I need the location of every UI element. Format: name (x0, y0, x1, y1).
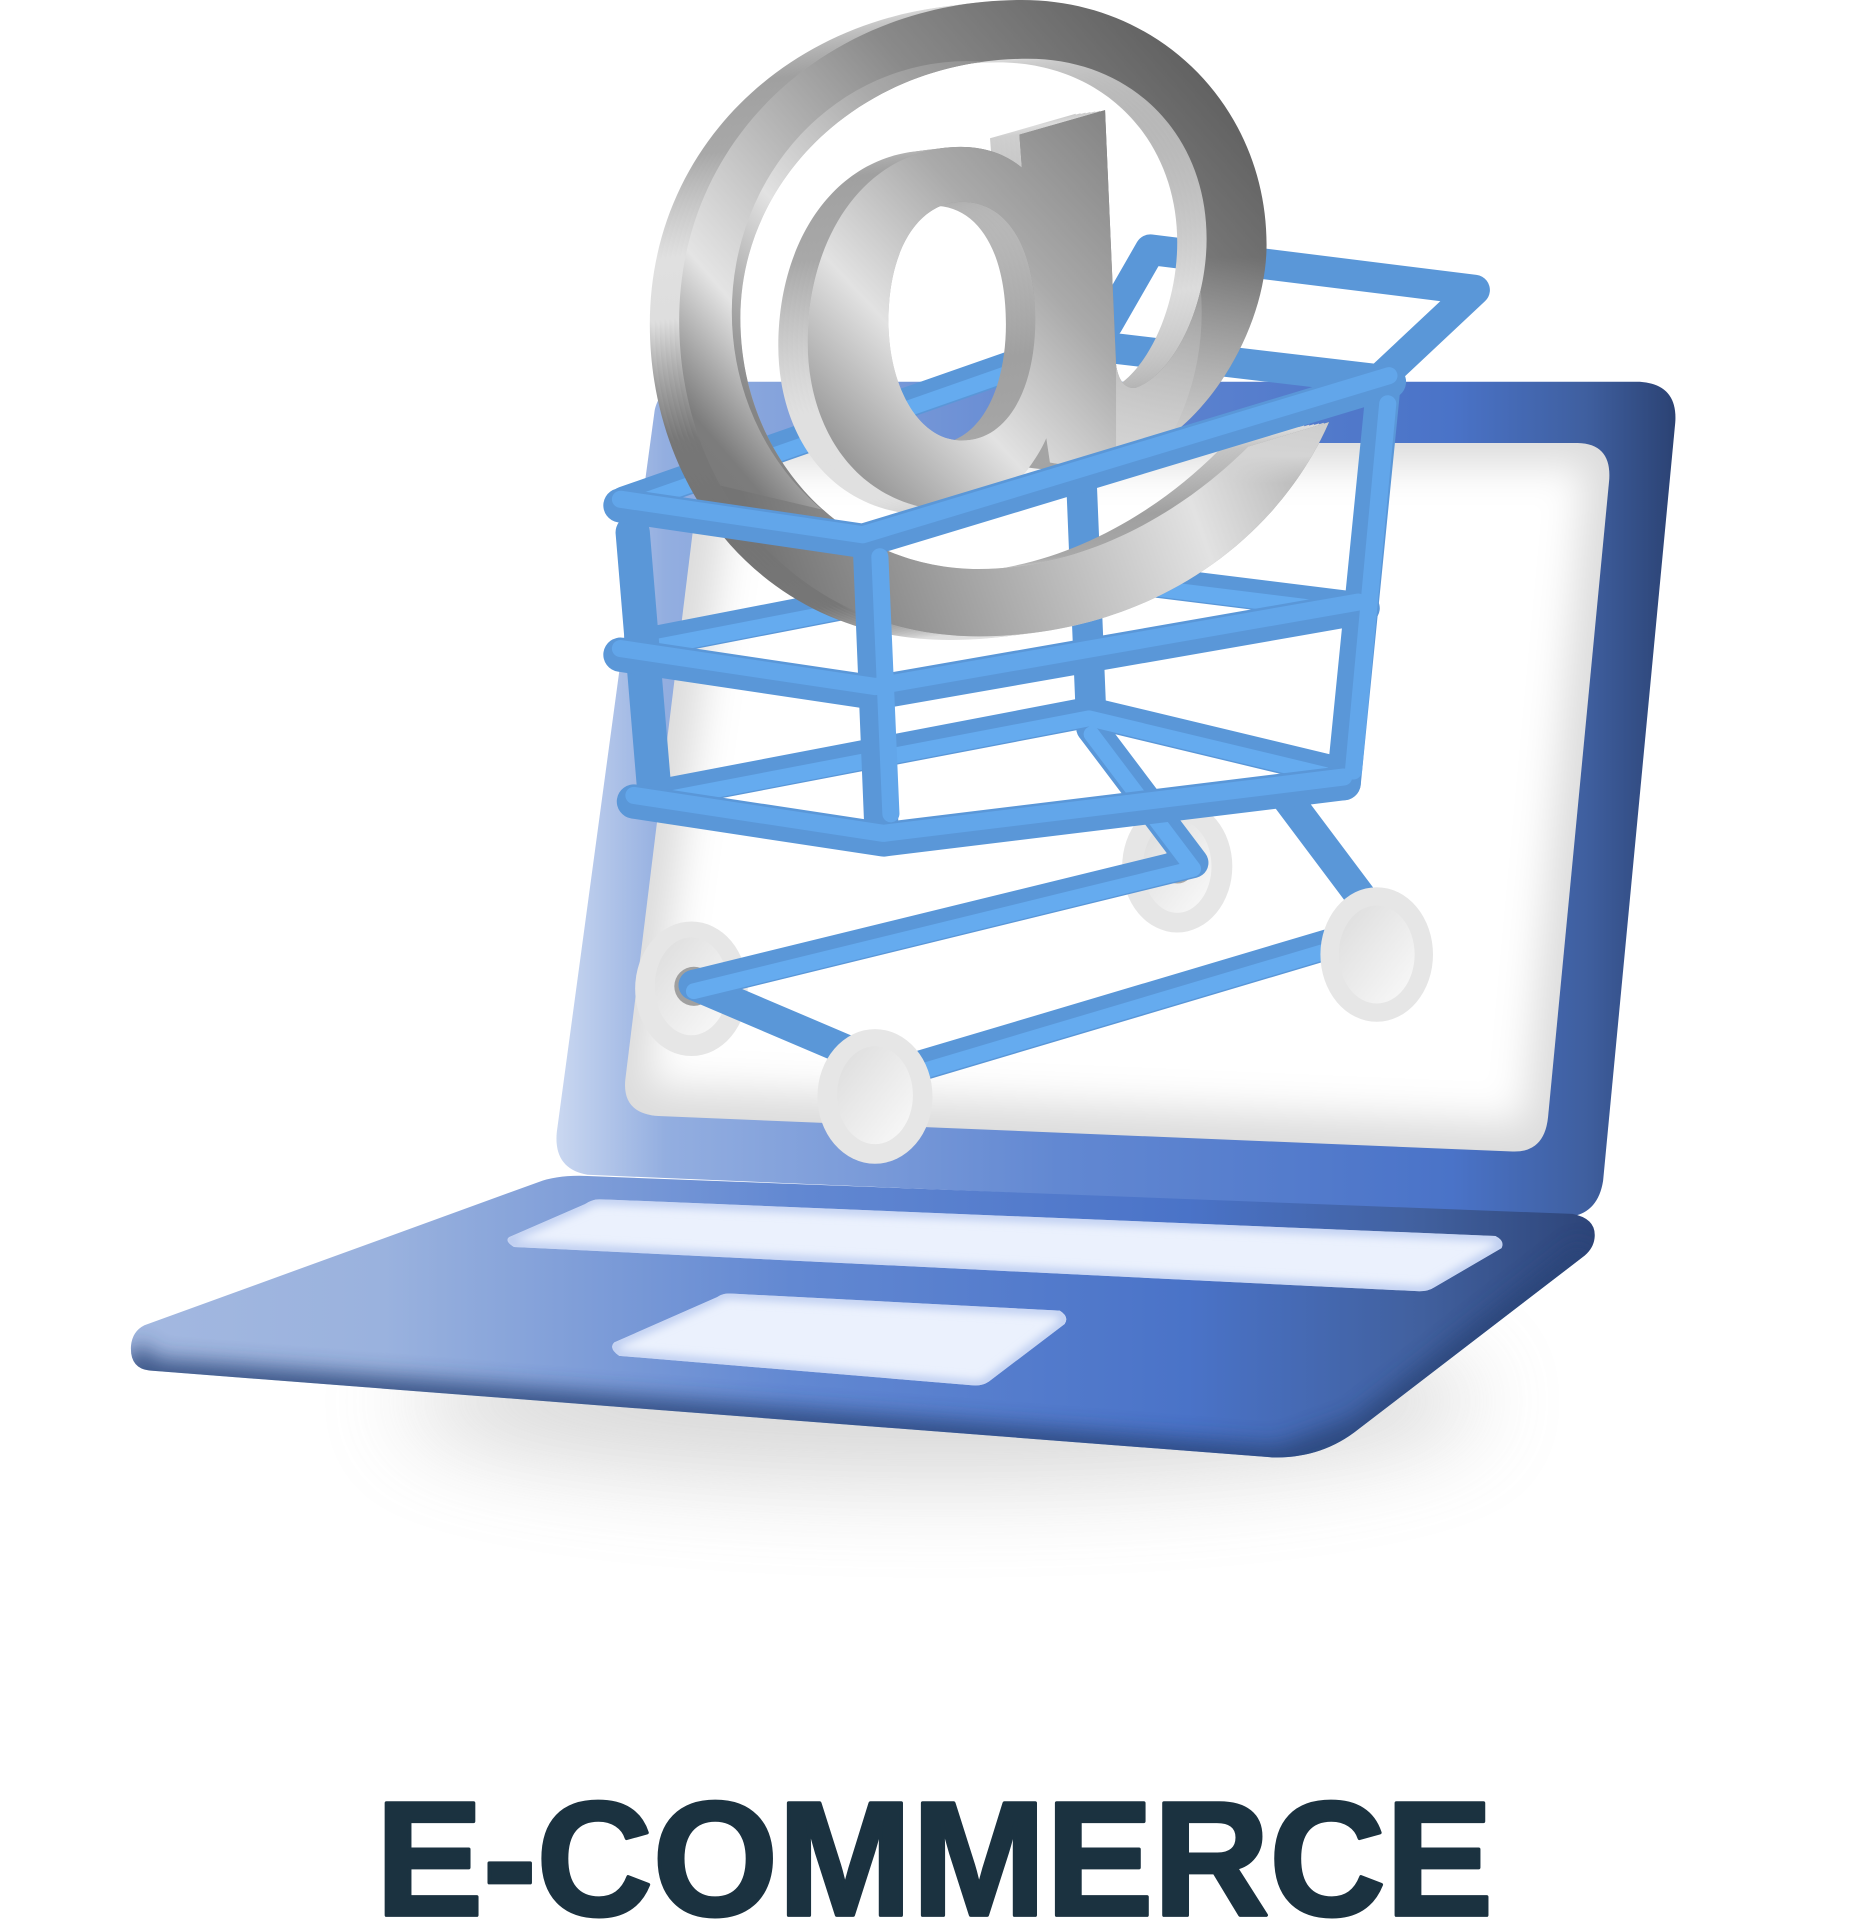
laptop lid (556, 382, 1675, 1216)
cart: front frame (620, 376, 1389, 839)
at sign (650, 0, 1329, 640)
laptop base (129, 1176, 1595, 1464)
keyboard panel (508, 1199, 1502, 1292)
ground shadow (404, 1322, 1481, 1481)
illustration: laptop with shopping cart and at sign (129, 0, 1675, 1481)
cart: left wheel (635, 921, 748, 1056)
trackpad (612, 1294, 1066, 1386)
cart: rear wheel (1122, 800, 1232, 932)
cart: right wheel (1320, 887, 1433, 1022)
cart: back frame (624, 250, 1475, 1085)
laptop screen (612, 434, 1628, 1169)
cart: front wheel (817, 1029, 932, 1164)
